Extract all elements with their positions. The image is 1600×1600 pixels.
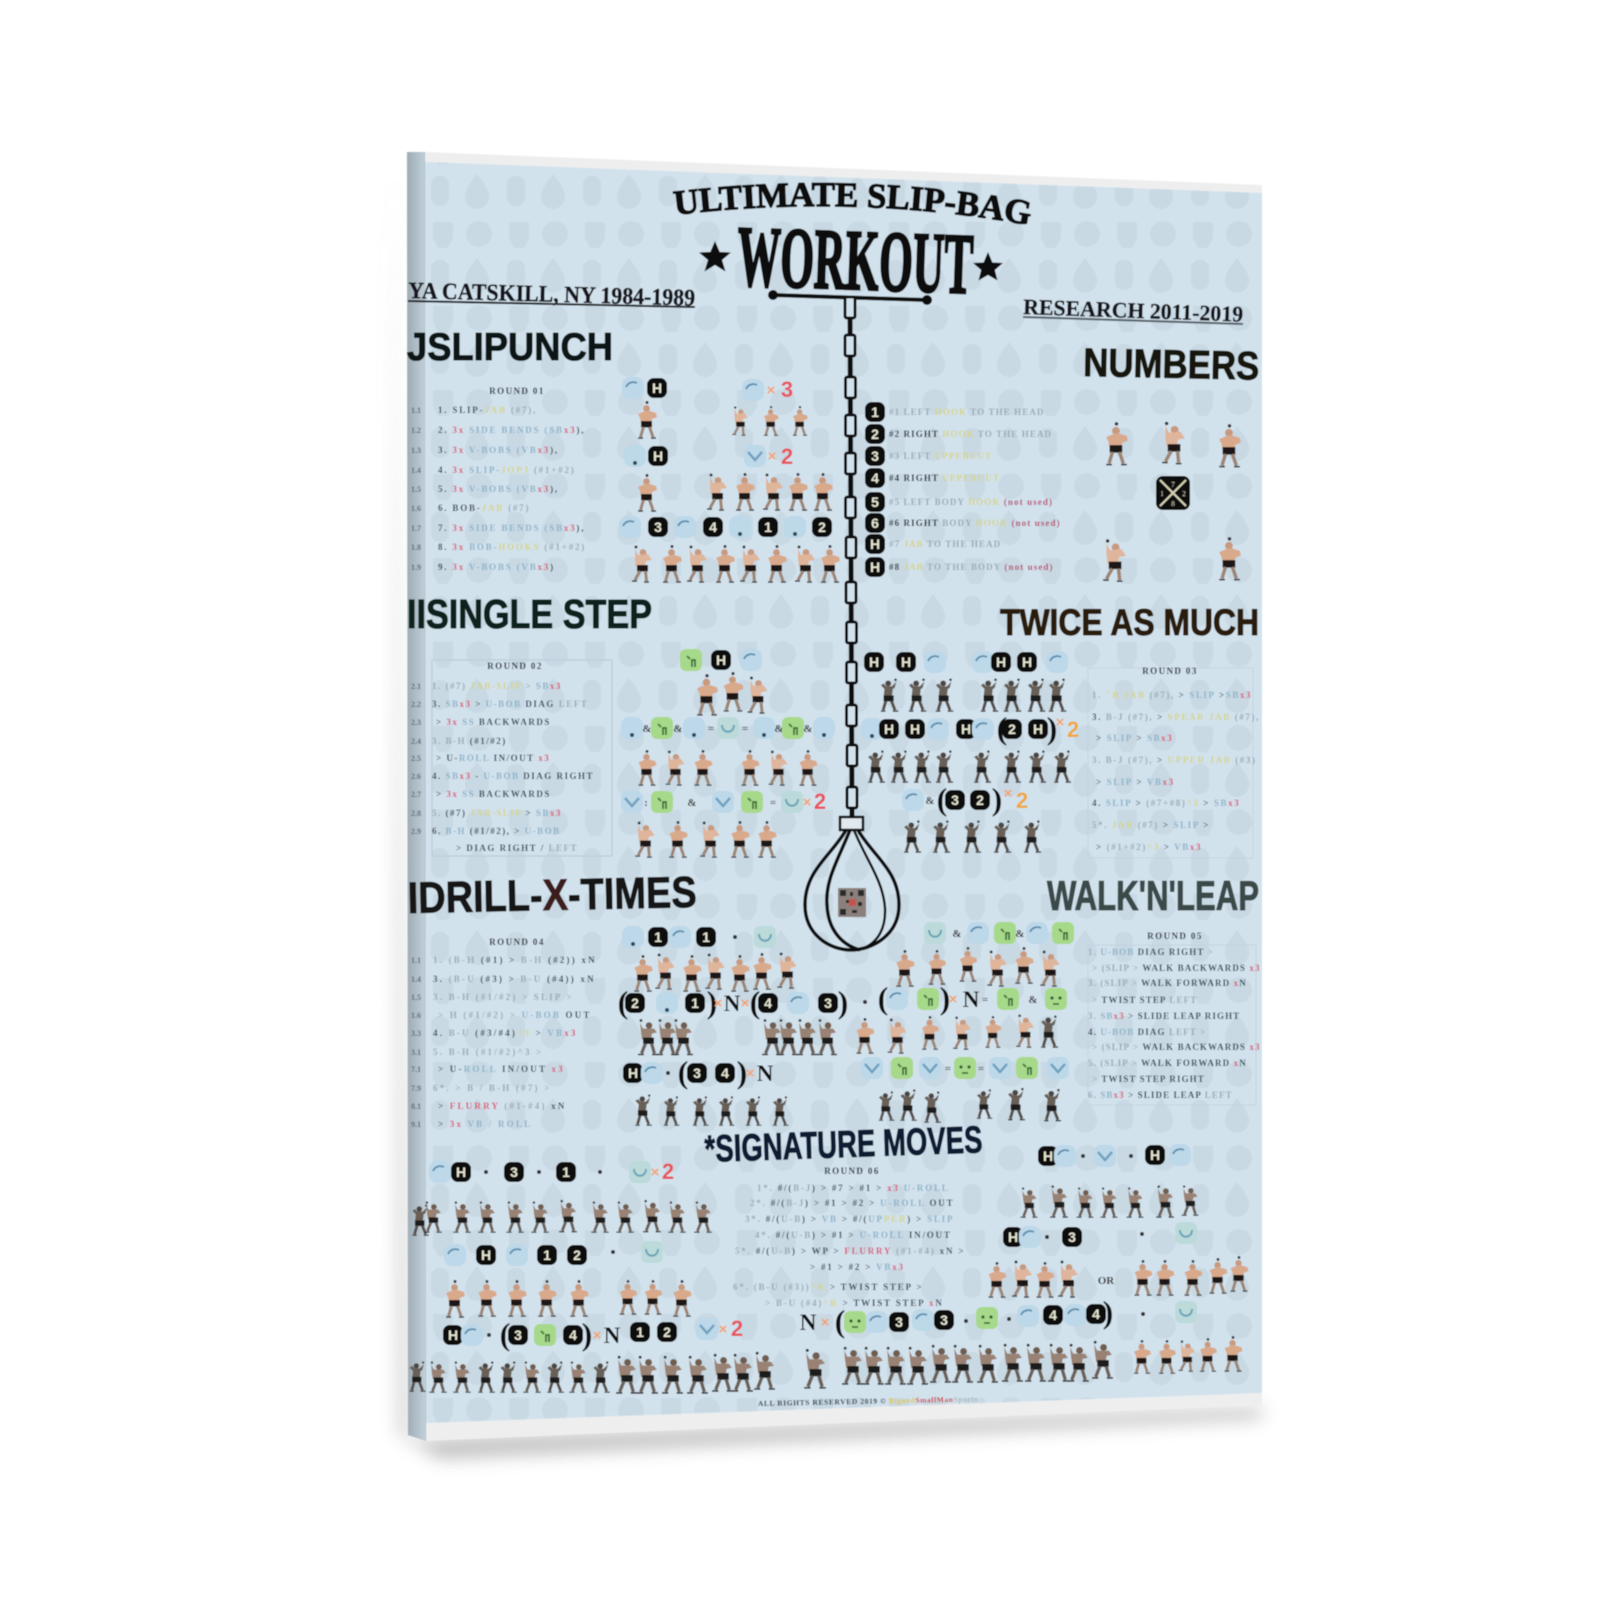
walk'n'leap combo icons and figures: N: [963, 987, 980, 1012]
round 02 list: 2.4: [411, 737, 421, 746]
round 01 list: 9. 3x V-BOBS (VBx3): [438, 562, 555, 572]
drill-x-times combo icons and figures: 3: [693, 1065, 701, 1081]
round 06 list: 5*. #/(U-B) > WP > FLURRY (#1-#4) xN >: [735, 1246, 965, 1256]
round 02 list: 2.3: [411, 718, 421, 727]
signature combo, lower left: 2: [662, 1159, 674, 1184]
numbers figures and emblem: [1103, 422, 1241, 581]
round 04 list: 3. (B-U (#3) > B-U (#4)) xN: [433, 974, 596, 984]
round 01 list: 2. 3x SIDE BENDS (SBx3),: [438, 425, 585, 435]
chain: [845, 296, 857, 818]
drill-x-times combo icons and figures: ): [707, 984, 717, 1020]
round 05 list: [1088, 931, 1261, 1100]
numbers legend: #2 RIGHT HOOK TO THE HEAD: [889, 429, 1052, 439]
round 02 list: > U-ROLL IN/OUT x3: [436, 753, 550, 763]
round 02 list: 4. SBx3 - U-BOB DIAG RIGHT: [432, 771, 594, 781]
signature combo, lower centre: (: [835, 1303, 845, 1339]
numbers legend: 2: [871, 426, 879, 442]
numbers legend: #3 LEFT UPPERCUT: [889, 451, 992, 461]
drill-x-times combo icons and figures: 4: [764, 995, 772, 1011]
twice as much combo icons and figures: 2: [976, 792, 984, 808]
twice as much combo icons and figures: 3: [951, 792, 959, 808]
walk'n'leap combo icons and figures: =: [945, 1063, 951, 1075]
canvas front: [425, 152, 1262, 1441]
round 02 list: 3. B-H (#1/#2): [432, 736, 507, 746]
round 04 list: > FLURRY (#1-#4) xN: [438, 1101, 567, 1111]
slipunch combo icons and figures: ×: [768, 448, 777, 465]
round 01 list: 1.8: [411, 543, 421, 552]
numbers legend: #5 LEFT BODY HOOK (not used): [889, 497, 1053, 507]
round 06 list: [733, 1166, 965, 1308]
drill-x-times combo icons and figures: ×: [746, 1065, 755, 1082]
round 03 list: > SLIP > SBx3: [1096, 733, 1173, 743]
walk'n'leap combo icons and figures: [856, 922, 1074, 1122]
round 02 list: 1. (#7) JAB-SLIP > SBx3: [432, 681, 562, 691]
round 06 list: 6*. (B-U (#3))^R > TWIST STEP >: [733, 1282, 923, 1292]
round 05 list: 3. SBx3 > SLIDE LEAP RIGHT: [1088, 1011, 1240, 1021]
slipunch combo icons and figures: 2: [818, 519, 826, 535]
round 01 list: 1.4: [411, 466, 421, 475]
round 01 list: 1.7: [411, 524, 421, 533]
signature combo, lower left: H: [456, 1164, 466, 1180]
numbers figures and emblem: 2: [1182, 490, 1186, 498]
location: catskill: YA CATSKILL, NY 1984-1989: [408, 278, 695, 312]
drill-x-times combo icons and figures: ×: [741, 995, 750, 1012]
numbers legend: 5: [871, 494, 879, 510]
single step combo icons and figures: =: [770, 797, 776, 809]
round 02 list: 3. SBx3 > U-BOB DIAG LEFT: [432, 699, 588, 709]
round 03 list: 3. B-J (#7), > SPEAR JAB (#7),: [1092, 712, 1260, 722]
round 01 list: 1.2: [411, 426, 421, 435]
slipunch combo icons and figures: 4: [709, 519, 717, 535]
walk'n'leap combo icons and figures: ): [940, 980, 950, 1016]
round 04 list: 1.5: [411, 993, 421, 1002]
round 02 list: ROUND 02: [487, 661, 543, 671]
drill-x-times combo icons and figures: ×: [714, 995, 723, 1012]
round 04 list: 6*. > B / B-H (#7) >: [433, 1083, 552, 1093]
heading: walk'n'leap: WALK'N'LEAP: [1047, 872, 1259, 919]
round 01 list: [411, 386, 586, 572]
icon: left star: [699, 241, 731, 272]
round 06 list: 2*. #/(B-J) > #1 > #2 > U-ROLL OUT: [750, 1198, 954, 1208]
twice as much combo icons and figures: [861, 651, 1079, 852]
walk'n'leap combo icons and figures: =: [978, 1063, 984, 1075]
research dates: RESEARCH 2011-2019: [1023, 294, 1244, 327]
signature combo, lower left: 2: [663, 1324, 671, 1340]
heading: numbers: NUMBERS: [1083, 341, 1260, 389]
signature combo, lower right: [988, 1144, 1248, 1373]
signature combo, lower left: 1: [562, 1164, 570, 1180]
drill-x-times combo icons and figures: 4: [721, 1065, 729, 1081]
heading: signature moves: *SIGNATURE MOVES: [704, 1119, 983, 1171]
twice as much combo icons and figures: H: [996, 654, 1006, 670]
round 04 list: > U-ROLL IN/OUT x3: [438, 1064, 565, 1074]
drill-x-times combo icons and figures: ): [838, 984, 848, 1020]
single step combo icons and figures: &: [642, 723, 652, 735]
round 02 list: > 3x SS BACKWARDS: [436, 789, 551, 799]
numbers legend: H: [870, 559, 880, 575]
round 01 list: 6. BOB-JAB (#7): [438, 503, 530, 513]
twice as much combo icons and figures: (: [997, 710, 1007, 746]
round 01 list: 1.9: [411, 563, 421, 572]
walk'n'leap combo icons and figures: &: [1015, 928, 1025, 940]
twice as much combo icons and figures: H: [1022, 654, 1032, 670]
round 02 list: [411, 661, 594, 853]
signature combo, lower left: 3: [514, 1327, 522, 1343]
twice as much combo icons and figures: 2: [1067, 717, 1079, 742]
signature combo, lower centre: 4: [1049, 1307, 1057, 1323]
numbers legend: #6 RIGHT BODY HOOK (not used): [889, 518, 1061, 528]
single step combo icons and figures: ×: [803, 794, 812, 811]
round 01 list: 8. 3x BOB-HOOKS (#1+#2): [438, 542, 586, 552]
numbers legend: #7 JAB TO THE HEAD: [889, 539, 1001, 549]
round 01 list: 1.1: [411, 406, 421, 415]
twice as much combo icons and figures: 2: [1008, 721, 1016, 737]
heading: twice as much: TWICE AS MUCH: [1000, 602, 1259, 643]
round 04 list: 1. (B-H (#1) > B-H (#2)) xN: [433, 955, 597, 965]
round 01 list: 1.5: [411, 485, 421, 494]
round 04 list: > H (#1/#2) > U-BOB OUT: [438, 1010, 592, 1020]
hanging bar: [768, 290, 932, 305]
twice as much combo icons and figures: H: [901, 654, 911, 670]
round 04 list: 3. B-H (#1/#2) > SLIP >: [433, 992, 574, 1002]
slipunch combo icons and figures: [619, 377, 840, 582]
round 04 list: ROUND 04: [489, 937, 545, 947]
round 05 list: 4. U-BOB DIAG LEFT >: [1088, 1027, 1206, 1037]
single step combo icons and figures: &: [774, 723, 784, 735]
round 05 list: 6. SBx3 > SLIDE LEAP LEFT: [1088, 1090, 1233, 1100]
speed bag: [805, 817, 899, 950]
round 04 list: 4. B-U (#3/#4)^3 > VBx3: [433, 1028, 578, 1038]
single step combo icons and figures: &: [803, 723, 813, 735]
drill-x-times combo icons and figures: 1: [691, 995, 699, 1011]
drill-x-times combo icons and figures: ): [737, 1054, 747, 1090]
round 04 list: 3.3: [411, 1029, 421, 1038]
icon: right star: [973, 252, 1003, 280]
signature combo, lower left: H: [448, 1327, 458, 1343]
round 02 list: 5. (#7) JAB-SLIP > SBx3: [432, 808, 562, 818]
slipunch combo icons and figures: 2: [781, 444, 793, 469]
signature combo, lower left: 3: [510, 1164, 518, 1180]
slipunch combo icons and figures: 3: [781, 377, 793, 402]
round 03 list: > SLIP > VBx3: [1096, 777, 1175, 787]
signature combo, lower centre: ): [1103, 1294, 1113, 1330]
drill-x-times combo icons and figures: 3: [824, 995, 832, 1011]
round 01 list: 3. 3x V-BOBS (VBx3),: [438, 445, 559, 455]
round 04 list: 3.1: [411, 1048, 421, 1057]
numbers legend: #8 JAB TO THE BODY (not used): [889, 562, 1054, 572]
round 02 list: > DIAG RIGHT / LEFT: [456, 843, 578, 853]
slipunch combo icons and figures: H: [652, 380, 662, 396]
signature combo, lower right: H: [1008, 1229, 1018, 1245]
round 02 list: 2.5: [411, 754, 421, 763]
round 05 list: > (SLIP > WALK BACKWARDS x3: [1092, 1042, 1261, 1052]
round 02 list: 2.7: [411, 790, 421, 799]
twice as much combo icons and figures: ×: [1004, 785, 1013, 802]
drill-x-times combo icons and figures: 2: [631, 995, 639, 1011]
signature combo, lower left: ): [582, 1316, 592, 1352]
signature combo, lower left: N: [604, 1323, 621, 1348]
walk'n'leap combo icons and figures: &: [1028, 994, 1038, 1006]
round 05 list: > (SLIP > WALK BACKWARDS x3: [1092, 963, 1261, 973]
round 06 list: 1*. #/(B-J) > #7 > #1 > x3 U-ROLL: [757, 1183, 950, 1193]
round 04 list: 7.9: [411, 1084, 421, 1093]
numbers legend: #4 RIGHT UPPERCUT: [889, 473, 1000, 483]
slipunch combo icons and figures: 3: [654, 519, 662, 535]
round 06 list: > #1 > #2 > VBx3: [810, 1262, 905, 1272]
round 01 list: 1.3: [411, 446, 421, 455]
single step combo icons and figures: :: [644, 797, 648, 809]
single step combo icons and figures: H: [716, 652, 726, 668]
round 01 list: 5. 3x V-BOBS (VBx3),: [438, 484, 559, 494]
drill-x-times combo icons and figures: 1: [702, 929, 710, 945]
drill-x-times combo icons and figures: N: [724, 991, 741, 1016]
heading: single step: IISINGLE STEP: [407, 591, 652, 637]
signature combo, lower left: H: [481, 1247, 491, 1263]
single step combo icons and figures: 2: [814, 789, 826, 814]
numbers legend: 6: [871, 515, 879, 531]
numbers legend: #1 LEFT HOOK TO THE HEAD: [889, 407, 1045, 417]
round 05 list: 5. (SLIP > WALK FORWARD xN: [1088, 1058, 1247, 1068]
round 03 list: 4. SLIP > (#7+#8)^3 > SBx3: [1092, 798, 1240, 808]
slipunch combo icons and figures: 1: [764, 519, 772, 535]
walk'n'leap combo icons and figures: (: [878, 980, 888, 1016]
round 01 list: 4. 3x SLIP-JOPJ (#1+#2): [438, 465, 576, 475]
footer credit: ALL RIGHTS RESERVED 2019 © BigandSmallManSports: [758, 1394, 978, 1408]
numbers legend: 4: [871, 470, 879, 486]
signature combo, lower left: 4: [569, 1327, 577, 1343]
twice as much combo icons and figures: H: [961, 721, 971, 737]
round 06 list: 4*. #/(U-B) > #1 > U-ROLL IN/OUT: [755, 1230, 952, 1240]
round 06 list: > B-U (#4)^R > TWIST STEP xN: [765, 1298, 944, 1308]
signature combo, lower centre: 4: [1092, 1306, 1100, 1322]
round 02 list: 2.1: [411, 682, 421, 691]
title: ultimate slip-bag: ULTIMATE SLIP-BAG: [672, 182, 1032, 225]
numbers figures and emblem: 8: [1171, 500, 1175, 508]
canvas side edge: [407, 152, 426, 1441]
signature combo, lower centre: 3: [940, 1312, 948, 1328]
numbers figures and emblem: 7: [1171, 481, 1175, 489]
single step combo icons and figures: &: [687, 797, 697, 809]
numbers legend: 1: [871, 404, 879, 420]
round 05 list: 3. (SLIP > WALK FORWARD xN: [1088, 978, 1247, 988]
drill-x-times combo icons and figures: N: [757, 1061, 774, 1086]
round 02 list: 2.9: [411, 827, 421, 836]
signature combo, lower left: 2: [731, 1316, 743, 1341]
twice as much combo icons and figures: ): [992, 781, 1002, 817]
single step combo icons and figures: =: [742, 723, 748, 735]
round 02 list: 6. B-H (#1/#2), > U-BOB: [432, 826, 561, 836]
signature combo, lower right: H: [1043, 1148, 1053, 1164]
twice as much combo icons and figures: ×: [1056, 714, 1065, 731]
round 02 list: 2.6: [411, 772, 421, 781]
title: workout: WORKOUT: [736, 208, 975, 312]
round 01 list: 1. SLIP-JAB (#7),: [438, 405, 537, 415]
drill-x-times combo icons and figures: (: [618, 984, 628, 1020]
signature combo, lower centre: 3: [895, 1314, 903, 1330]
round 02 list: 2.2: [411, 700, 421, 709]
drill-x-times combo icons and figures: 1: [654, 929, 662, 945]
numbers legend: H: [870, 536, 880, 552]
twice as much combo icons and figures: H: [910, 721, 920, 737]
round 04 list: 7.1: [411, 1065, 421, 1074]
heading: drill-x-times: IDRILL-X-TIMES: [407, 868, 697, 923]
walk'n'leap combo icons and figures: &: [952, 928, 962, 940]
twice as much combo icons and figures: H: [1033, 721, 1043, 737]
drill-x-times combo icons and figures: (: [750, 984, 760, 1020]
signature combo, lower right: OR: [1098, 1275, 1115, 1287]
drill-x-times combo icons and figures: [618, 926, 848, 1125]
numbers legend: 3: [871, 448, 879, 464]
round 06 list: ROUND 06: [824, 1166, 880, 1176]
heading: slipunch: JSLIPUNCH: [407, 326, 613, 369]
round 05 list: ROUND 05: [1147, 931, 1203, 941]
walk'n'leap combo icons and figures: ×: [949, 991, 958, 1008]
round 04 list: 1.1: [411, 956, 421, 965]
signature combo, lower centre: ×: [821, 1314, 830, 1331]
numbers legend: [865, 402, 1061, 577]
round 05 list: > TWIST STEP LEFT: [1092, 995, 1197, 1005]
round 04 list: 1.6: [411, 1011, 421, 1020]
twice as much combo icons and figures: ): [1047, 710, 1057, 746]
signature combo, lower left: ×: [651, 1164, 660, 1181]
round 05 list: > TWIST STEP RIGHT: [1092, 1074, 1205, 1084]
signature combo, lower left: [410, 1159, 775, 1393]
single step combo icons and figures: [621, 649, 835, 857]
round 03 list: > (#1+#2)^3 > VBx3: [1096, 842, 1202, 852]
twice as much combo icons and figures: H: [884, 721, 894, 737]
signature combo, lower centre: N: [800, 1310, 817, 1335]
signature combo, lower centre: [800, 1294, 1113, 1388]
round 04 list: 1.4: [411, 975, 421, 984]
signature combo, lower left: 1: [636, 1324, 644, 1340]
drill-x-times combo icons and figures: (: [678, 1054, 688, 1090]
twice as much combo icons and figures: H: [869, 654, 879, 670]
single step combo icons and figures: =: [708, 723, 714, 735]
single step combo icons and figures: &: [673, 723, 683, 735]
numbers figures and emblem: 1: [1160, 490, 1164, 498]
twice as much combo icons and figures: 2: [1016, 788, 1028, 813]
signature combo, lower left: 2: [573, 1247, 581, 1263]
signature combo, lower left: 1: [543, 1247, 551, 1263]
drill-x-times combo icons and figures: H: [628, 1065, 638, 1081]
signature combo, lower left: ×: [593, 1327, 602, 1344]
round 04 list: 9.1: [411, 1120, 421, 1129]
slipunch combo icons and figures: H: [653, 448, 663, 464]
round 03 list: 5*. JAB (#7) > SLIP >: [1092, 820, 1210, 830]
round 03 list: 3. B-J (#7), > UPPER JAB (#3): [1092, 755, 1257, 765]
round 04 list: > 3x VB / ROLL: [438, 1119, 532, 1129]
round 05 list: 1. U-BOB DIAG RIGHT >: [1088, 947, 1214, 957]
canvas shadow: [394, 158, 1262, 1458]
round 02 list: 2.8: [411, 809, 421, 818]
round 02 list: > 3x SS BACKWARDS: [436, 717, 551, 727]
signature combo, lower left: (: [500, 1316, 510, 1352]
twice as much combo icons and figures: &: [925, 795, 935, 807]
round 01 list: 7. 3x SIDE BENDS (SBx3),: [438, 523, 585, 533]
round 03 list: 1. "B JAB (#7), > SLIP >SBx3: [1092, 690, 1252, 700]
signature combo, lower right: 3: [1068, 1229, 1076, 1245]
round 04 list: 5. B-H (#1/#2)^3 >: [433, 1047, 543, 1057]
walk'n'leap combo icons and figures: =: [982, 994, 988, 1006]
twice as much combo icons and figures: (: [937, 781, 947, 817]
round 01 list: ROUND 01: [489, 386, 545, 396]
round 04 list: 8.1: [411, 1102, 421, 1111]
round 03 list: [1092, 666, 1260, 852]
round 03 list: ROUND 03: [1142, 666, 1198, 676]
round 04 list: [411, 937, 597, 1129]
signature combo, lower right: H: [1150, 1147, 1160, 1163]
round 01 list: 1.6: [411, 504, 421, 513]
slipunch combo icons and figures: ×: [767, 382, 776, 399]
signature combo, lower left: ×: [719, 1321, 728, 1338]
round 06 list: 3*. #/(U-B) > VB > #/(UPPER) > SLIP: [745, 1214, 954, 1224]
